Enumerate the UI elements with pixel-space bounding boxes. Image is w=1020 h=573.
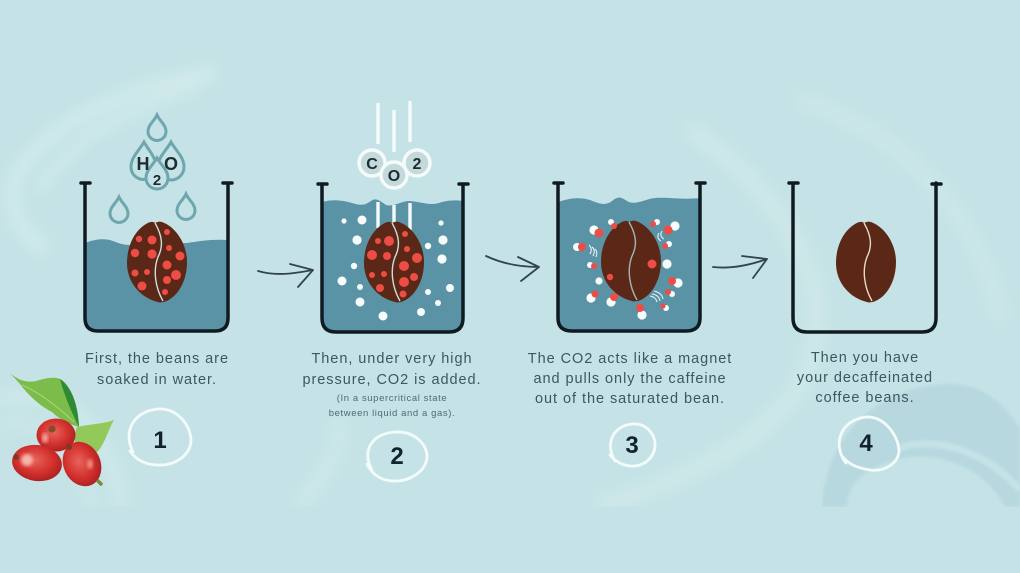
- step number 2: 2: [390, 443, 404, 470]
- caption 2: Then, under very high: [311, 351, 473, 367]
- CO2 lines entering water: [378, 101, 410, 230]
- caption 4: coffee beans.: [815, 390, 915, 406]
- icon: water drops H2O: [110, 115, 195, 222]
- arrow 2: [486, 256, 539, 281]
- step number 3: 3: [625, 432, 639, 459]
- icon: CO2 molecules: C: [366, 156, 378, 173]
- illustration: coffee berries and leaves: [10, 373, 114, 493]
- beaker: [318, 184, 468, 332]
- icon: CO2 molecules: 2: [413, 156, 422, 173]
- berry: right: [56, 435, 108, 493]
- caption 3: and pulls only the caffeine: [533, 371, 727, 387]
- step number 3: [610, 424, 655, 466]
- icon: CO2 molecules: [359, 150, 430, 188]
- coffee bean with caffeine: [127, 222, 187, 302]
- step 4: beaker with decaffeinated bean: [789, 183, 941, 332]
- coffee bean with caffeine: [364, 222, 424, 302]
- water: [85, 239, 228, 331]
- caption 1: soaked in water.: [97, 372, 217, 388]
- beaker: [789, 183, 941, 332]
- step 2: beaker with CO2: [318, 101, 468, 332]
- caption 4: Then you have: [811, 350, 919, 366]
- caption 2 note: between liquid and a gas).: [329, 408, 455, 419]
- beaker: [81, 183, 232, 331]
- step 1: beaker with water: [81, 115, 232, 331]
- icon: CO2 molecules: O: [388, 168, 400, 185]
- leaf: large: [10, 373, 79, 427]
- berry: left: [10, 442, 64, 484]
- step number 1: 1: [153, 427, 167, 454]
- caffeine molecules bound to CO2: [573, 219, 683, 320]
- caption 1: First, the beans are: [85, 351, 229, 367]
- coffee bean: [601, 221, 661, 301]
- berry: top: [36, 418, 76, 452]
- coffee bean: [836, 222, 896, 302]
- background swirls: [0, 72, 1020, 507]
- step number 1: [129, 409, 191, 465]
- caption 4: your decaffeinated: [797, 370, 933, 386]
- caption 2 note: (In a supercritical state: [337, 393, 447, 404]
- step number 2: [367, 432, 427, 481]
- step 3: beaker with caffeine pulled out: [554, 183, 705, 331]
- icon: water drops H2O: 2: [153, 172, 161, 189]
- arrow 3: [713, 256, 767, 278]
- step number 4: [839, 417, 899, 470]
- icon: water drops H2O: O: [164, 154, 178, 174]
- arrow 1: [258, 264, 313, 287]
- water: [322, 199, 463, 332]
- berry stem: [97, 480, 102, 485]
- beaker: [554, 183, 705, 331]
- icon: water drops H2O: H: [136, 154, 150, 174]
- caption 2: pressure, CO2 is added.: [302, 372, 482, 388]
- caption 3: The CO2 acts like a magnet: [528, 351, 732, 367]
- water: [558, 198, 700, 331]
- step number 4: 4: [859, 430, 873, 457]
- CO2 bubbles: [338, 216, 454, 320]
- caption 3: out of the saturated bean.: [535, 391, 725, 407]
- leaf: small: [75, 420, 114, 452]
